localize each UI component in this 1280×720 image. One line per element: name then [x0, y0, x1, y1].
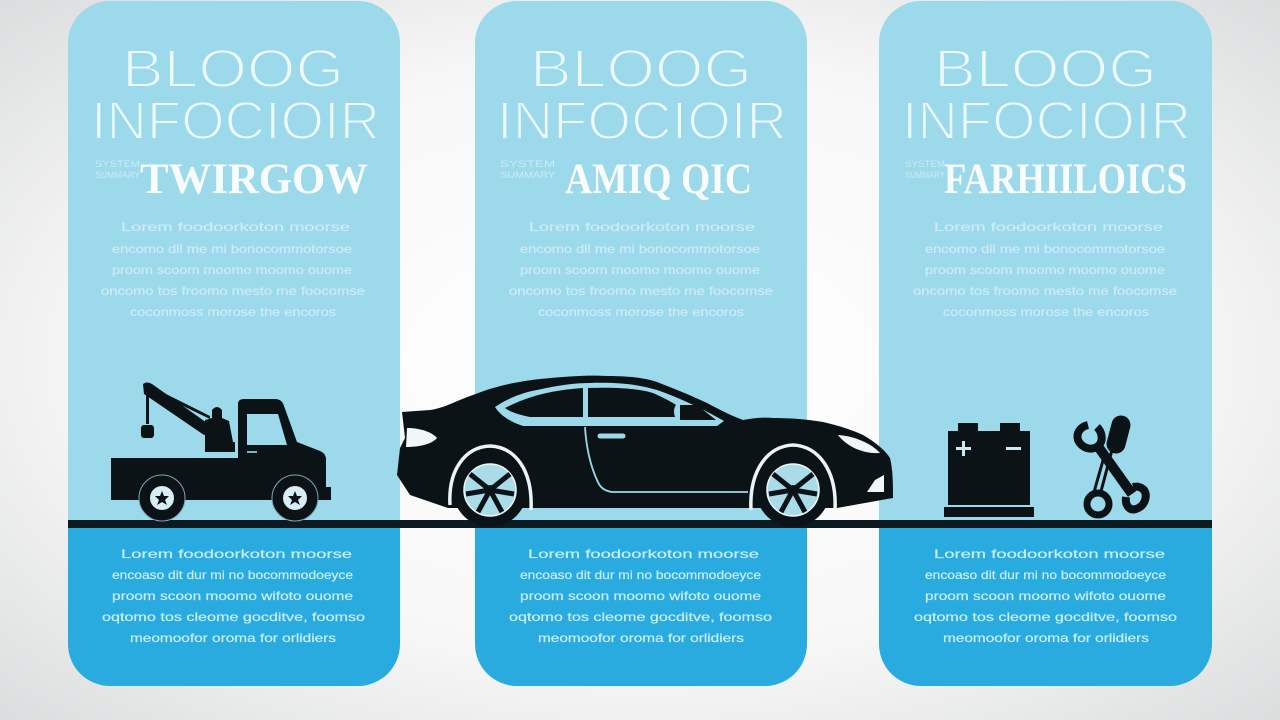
left panel heading	[91, 39, 380, 203]
left panel upper text: encomo dil me mi bonocommotorsoe	[112, 242, 352, 256]
middle panel heading: BLOOG	[530, 39, 752, 99]
middle panel upper text: proom scoom moomo moomo ouome	[520, 263, 760, 277]
left panel lower text: encoaso dit dur mi no bocommodoeyce	[112, 568, 353, 582]
middle panel lower text	[509, 547, 772, 645]
left panel lower text: proom scoon moomo wifoto ouome	[112, 589, 353, 603]
right panel heading: SYSTEM	[905, 159, 945, 169]
left panel upper text: oncomo tos froomo mesto me foocomse	[101, 284, 365, 298]
panel: left	[68, 1, 400, 686]
car body	[397, 376, 893, 508]
middle panel upper text: coconmoss morose the encoros	[538, 305, 744, 319]
right panel lower text: meomoofor oroma for orlidiers	[943, 631, 1149, 645]
middle panel lower text: encoaso dit dur mi no bocommodoeyce	[520, 568, 761, 582]
middle panel lower text: oqtomo tos cleome gocditve, foomso	[509, 610, 772, 624]
left panel upper text: coconmoss morose the encoros	[130, 305, 336, 319]
middle panel upper text	[509, 220, 773, 319]
left panel lower text: Lorem foodoorkoton moorse	[121, 547, 352, 561]
icon: battery	[944, 423, 1034, 517]
right panel heading	[902, 39, 1191, 203]
right panel lower text	[914, 547, 1177, 645]
road line	[68, 520, 1212, 528]
middle panel lower text: meomoofor oroma for orlidiers	[538, 631, 744, 645]
middle panel upper text: Lorem foodoorkoton moorse	[529, 220, 755, 234]
rear wheel	[450, 446, 531, 527]
right panel lower text: proom scoon moomo wifoto ouome	[925, 589, 1166, 603]
right panel heading: FARHIILOICS	[944, 156, 1187, 203]
right panel upper text: oncomo tos froomo mesto me foocomse	[913, 284, 1177, 298]
right panel lower text: Lorem foodoorkoton moorse	[934, 547, 1165, 561]
right panel upper text: coconmoss morose the encoros	[943, 305, 1149, 319]
left panel heading: TWIRGOW	[140, 156, 368, 203]
middle panel heading: SUMMARY	[500, 170, 555, 180]
icon: wrench and screwdriver	[1077, 425, 1146, 515]
right panel lower text: oqtomo tos cleome gocditve, foomso	[914, 610, 1177, 624]
left panel heading: SUMMARY	[95, 170, 140, 180]
panel: right	[879, 1, 1212, 686]
right panel upper text: encomo dil me mi bonocommotorsoe	[925, 242, 1165, 256]
right panel upper text: proom scoom moomo moomo ouome	[925, 263, 1165, 277]
car door details	[585, 427, 748, 492]
panel: middle	[475, 1, 807, 686]
middle panel lower text: proom scoon moomo wifoto ouome	[520, 589, 761, 603]
middle panel upper text: oncomo tos froomo mesto me foocomse	[509, 284, 773, 298]
right panel heading: SUMMARY	[905, 170, 945, 180]
left panel heading: SYSTEM	[95, 159, 140, 169]
car windows	[495, 383, 724, 426]
car lights	[406, 428, 884, 492]
icon: tow truck	[111, 382, 331, 521]
middle panel heading: SYSTEM	[500, 159, 555, 169]
left panel heading: INFOCIOIR	[91, 91, 380, 151]
middle panel heading	[497, 39, 787, 203]
middle panel upper text: encomo dil me mi bonocommotorsoe	[520, 242, 760, 256]
left panel upper text: proom scoom moomo moomo ouome	[112, 263, 352, 277]
left panel upper text	[101, 220, 365, 319]
left panel lower text: oqtomo tos cleome gocditve, foomso	[102, 610, 365, 624]
right panel upper text	[913, 220, 1177, 319]
right panel heading: INFOCIOIR	[902, 91, 1191, 151]
left panel lower text	[102, 547, 365, 645]
right panel heading: BLOOG	[934, 39, 1157, 99]
left panel upper text: Lorem foodoorkoton moorse	[121, 220, 350, 234]
right panel lower text: encoaso dit dur mi no bocommodoeyce	[925, 568, 1166, 582]
left panel lower text: meomoofor oroma for orlidiers	[130, 631, 336, 645]
middle panel heading: AMIQ QIC	[565, 156, 752, 203]
middle panel lower text: Lorem foodoorkoton moorse	[528, 547, 759, 561]
right panel upper text: Lorem foodoorkoton moorse	[934, 220, 1163, 234]
icon: car	[397, 376, 893, 527]
left panel heading: BLOOG	[122, 39, 344, 99]
middle panel heading: INFOCIOIR	[497, 91, 787, 151]
front wheel	[751, 445, 835, 527]
